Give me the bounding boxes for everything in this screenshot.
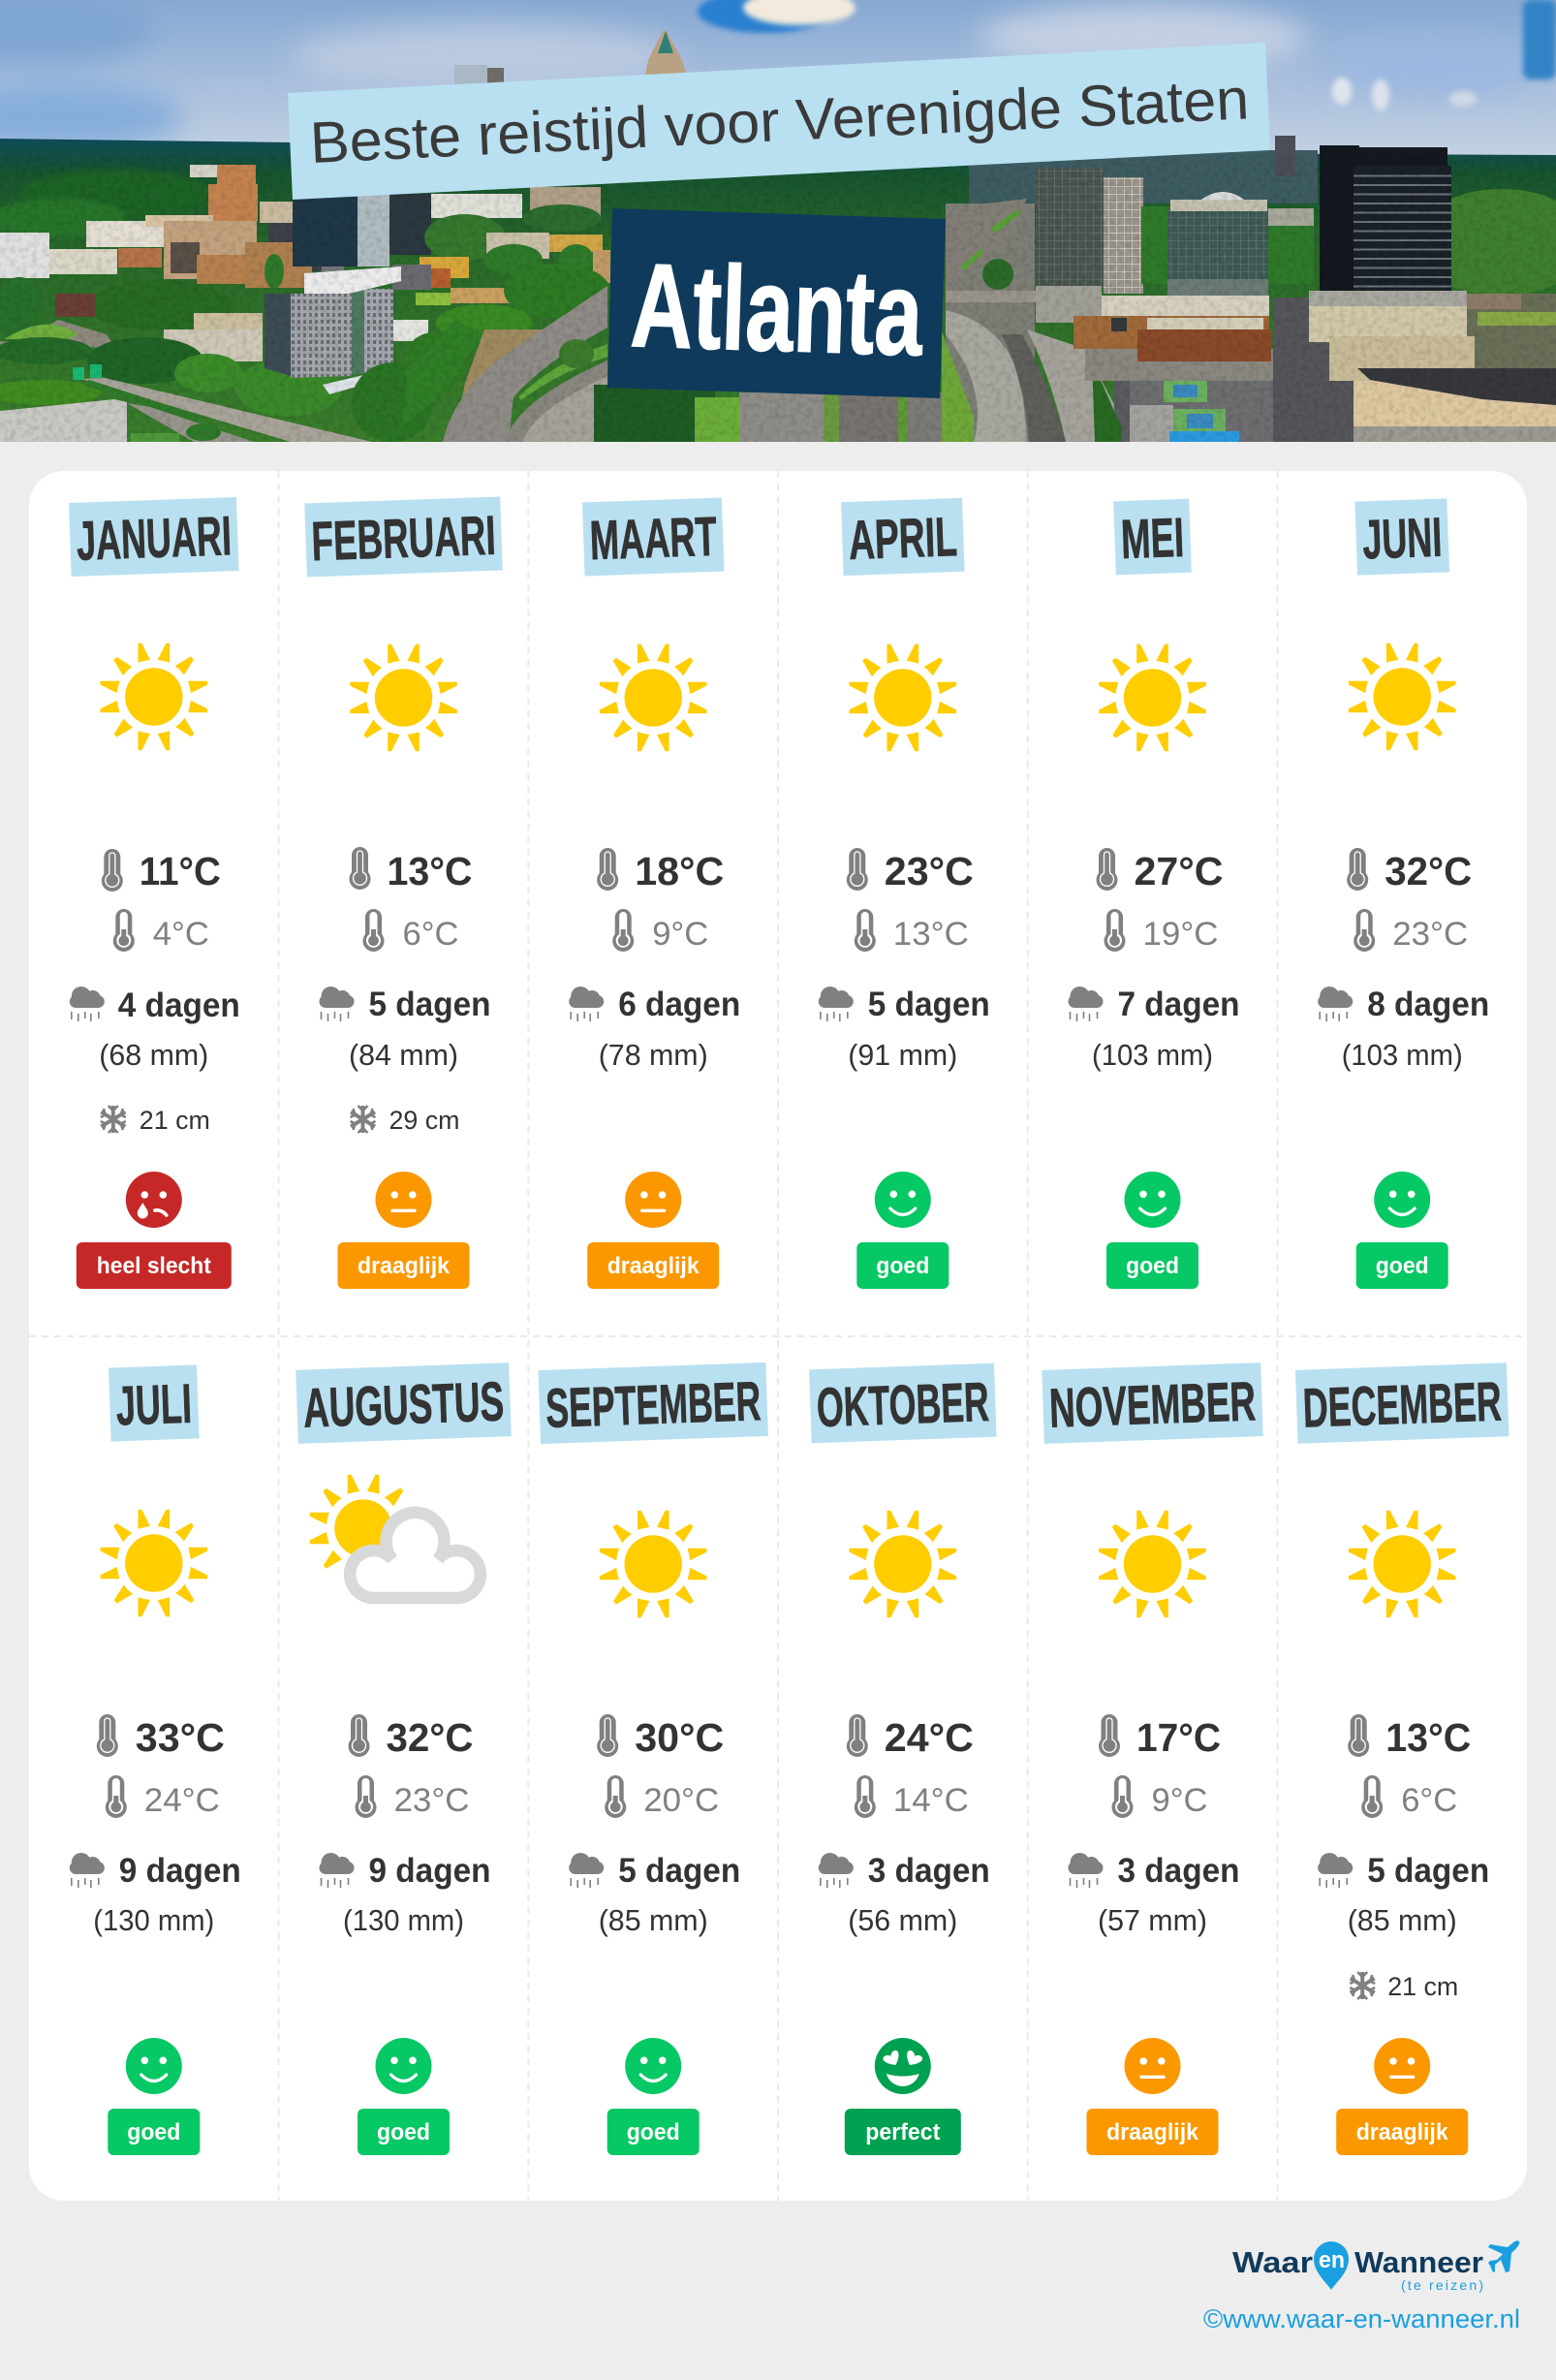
rain days <box>569 986 740 1023</box>
face: good <box>1124 1172 1180 1228</box>
title banner: Beste reistijd voor Verenigde Staten <box>308 66 1251 175</box>
low temperature: 14°C <box>893 1782 969 1819</box>
rain days <box>1068 1852 1240 1890</box>
low temperature: 6°C <box>403 916 458 953</box>
high temperature: 30°C <box>635 1715 724 1760</box>
rain days <box>1068 986 1240 1023</box>
lower left roads and roof <box>81 378 372 442</box>
high temperature: 18°C <box>635 849 724 893</box>
rating badge: goed <box>627 2119 680 2145</box>
high temperature <box>349 1714 473 1760</box>
low temperature <box>605 1775 719 1819</box>
face: good <box>875 1172 931 1228</box>
low temperature: 9°C <box>652 916 708 953</box>
snowfall <box>351 1106 459 1135</box>
rating badge <box>337 1242 469 1289</box>
month label <box>582 498 724 576</box>
header photo: Atlanta skyline <box>0 0 1556 442</box>
rating badge: draaglijk <box>1356 2119 1448 2145</box>
rating badge <box>587 1242 719 1289</box>
face: neutral <box>1374 2038 1430 2094</box>
month label <box>296 1362 512 1444</box>
logo: Waar en Wanneer <box>1232 2240 1519 2293</box>
high temperature <box>1347 848 1472 893</box>
low temperature: 20°C <box>643 1782 719 1819</box>
rating badge <box>358 2109 450 2155</box>
panel: februari <box>304 496 503 1289</box>
rating badge <box>607 2109 700 2155</box>
logo: Waar en Wanneer: (te reizen) <box>1401 2277 1483 2293</box>
rain days: 3 dagen <box>868 1852 990 1890</box>
panel: december <box>1295 1362 1509 2155</box>
rain days: 5 dagen <box>618 1852 740 1890</box>
month label <box>69 497 239 577</box>
month label <box>304 496 503 578</box>
rating badge: goed <box>377 2119 430 2145</box>
panel: augustus <box>296 1362 512 2155</box>
hotel <box>265 294 291 376</box>
month label: MAART <box>589 506 718 572</box>
high temperature: 32°C <box>1385 849 1472 893</box>
left highway and trees <box>352 362 433 442</box>
panel: climate calendar card <box>29 471 1527 2201</box>
low temperature <box>855 909 969 953</box>
high temperature: 32°C <box>386 1715 473 1760</box>
snowfall: 29 cm <box>389 1106 459 1135</box>
icon: airplane <box>1488 2240 1519 2272</box>
panel: juli <box>70 1364 241 2155</box>
rating badge <box>108 2109 200 2155</box>
high temperature <box>847 1714 974 1760</box>
right side base <box>946 204 1035 442</box>
month label: JULI <box>115 1373 193 1437</box>
icon: sun <box>1099 1511 1205 1617</box>
icon: sun behind cloud <box>310 1475 481 1598</box>
high temperature: 23°C <box>885 849 974 893</box>
rain days <box>819 986 990 1023</box>
high temperature: 13°C <box>1385 1715 1471 1760</box>
face: very bad <box>126 1172 182 1228</box>
rating badge <box>1106 1242 1198 1289</box>
rating badge <box>1336 2109 1468 2155</box>
high temperature: 17°C <box>1136 1715 1221 1760</box>
low temperature: 13°C <box>893 916 969 953</box>
month label <box>1354 498 1449 576</box>
month label: OKTOBER <box>816 1371 990 1439</box>
rain days: 9 dagen <box>368 1852 490 1890</box>
month label <box>841 498 965 576</box>
panel: mei <box>1068 499 1240 1289</box>
high temperature: 27°C <box>1134 849 1223 893</box>
month label: FEBRUARI <box>311 505 497 573</box>
face: perfect <box>875 2038 931 2094</box>
low temperature: 19°C <box>1143 916 1219 953</box>
rain days: 4 dagen <box>118 986 240 1024</box>
rain days <box>569 1852 740 1890</box>
high temperature <box>97 1714 225 1760</box>
high temperature <box>1348 1714 1471 1760</box>
month label <box>109 1364 200 1442</box>
month label <box>1042 1362 1263 1444</box>
panel: juni <box>1318 498 1489 1289</box>
rating badge: draaglijk <box>1106 2119 1199 2145</box>
face: neutral <box>625 1172 681 1228</box>
rating badge <box>856 1242 949 1289</box>
high temperature: 24°C <box>885 1715 974 1760</box>
rain days: 8 dagen <box>1367 986 1489 1023</box>
high temperature <box>597 1714 724 1760</box>
low temperature <box>855 1775 969 1819</box>
logo: Waar en Wanneer: Waar <box>1232 2245 1313 2279</box>
low temperature <box>362 909 459 953</box>
icon: sun <box>351 644 457 751</box>
low temperature: 24°C <box>144 1782 220 1819</box>
low temperature: 23°C <box>1392 916 1468 953</box>
high temperature: 13°C <box>388 849 473 893</box>
panel: november <box>1042 1362 1263 2155</box>
rain days: 3 dagen <box>1118 1852 1240 1890</box>
rainfall: (130 mm) <box>343 1903 464 1937</box>
face: good <box>1374 1172 1430 1228</box>
icon: sun <box>1349 1511 1455 1617</box>
low temperature <box>1354 909 1468 953</box>
rain days <box>70 1852 241 1890</box>
rainfall: (57 mm) <box>1098 1903 1207 1937</box>
panel: september <box>538 1362 768 2155</box>
rain days <box>320 986 490 1023</box>
high temperature: 11°C <box>140 849 221 893</box>
low temperature: 6°C <box>1401 1782 1457 1819</box>
rain days: 7 dagen <box>1118 986 1240 1023</box>
rainfall: (84 mm) <box>349 1038 458 1072</box>
rain days <box>819 1852 990 1890</box>
snowfall <box>101 1106 210 1135</box>
low temperature: 9°C <box>1151 1782 1207 1819</box>
icon: location pin <box>1314 2241 1349 2290</box>
low temperature <box>113 909 209 953</box>
rain days: 6 dagen <box>618 986 740 1023</box>
city title box: Atlanta: Atlanta <box>629 239 925 381</box>
rating badge: heel slecht <box>97 1253 211 1279</box>
rainfall: (68 mm) <box>99 1038 208 1072</box>
city title box: Atlanta <box>607 208 946 398</box>
rating badge: goed <box>127 2119 180 2145</box>
low temperature: 23°C <box>393 1782 469 1819</box>
logo: Waar en Wanneer: en <box>1319 2247 1345 2273</box>
rating badge <box>1087 2109 1219 2155</box>
snowfall: 21 cm <box>140 1106 210 1135</box>
face: good <box>625 2038 681 2094</box>
rainfall: (103 mm) <box>1342 1038 1463 1072</box>
rainfall: (91 mm) <box>848 1038 957 1072</box>
rain days: 9 dagen <box>119 1852 241 1890</box>
high temperature <box>1099 1714 1221 1760</box>
month label <box>538 1362 768 1444</box>
panel: maart <box>569 498 740 1289</box>
low temperature: 4°C <box>153 916 209 953</box>
high temperature: 33°C <box>136 1715 225 1760</box>
low temperature <box>1105 909 1219 953</box>
face: good <box>376 2038 432 2094</box>
rating badge: draaglijk <box>607 1253 700 1279</box>
icon: sun <box>101 643 207 750</box>
rating badge <box>845 2109 961 2155</box>
snowfall: 21 cm <box>1387 1972 1458 2001</box>
rating badge: goed <box>1126 1253 1179 1279</box>
icon: sun <box>1099 644 1205 751</box>
icon: sun <box>600 1511 706 1617</box>
snowfall <box>1350 1972 1458 2001</box>
title banner <box>288 43 1270 200</box>
month label: JANUARI <box>76 505 233 573</box>
panel: oktober <box>809 1363 997 2155</box>
month label <box>1113 499 1192 575</box>
month label <box>809 1363 997 1443</box>
rating badge: goed <box>1376 1253 1429 1279</box>
rain days <box>1318 1852 1489 1890</box>
month label: AUGUSTUS <box>302 1370 505 1440</box>
low temperature <box>355 1775 469 1819</box>
website url: ©www.waar-en-wanneer.nl <box>1203 2304 1520 2333</box>
rain days <box>70 986 240 1024</box>
month label: MEI <box>1120 507 1185 571</box>
low temperature <box>106 1775 220 1819</box>
panel: april <box>819 498 990 1289</box>
low temperature <box>612 909 708 953</box>
low temperature <box>1361 1775 1457 1819</box>
month label: APRIL <box>848 506 958 572</box>
panel: januari <box>69 497 240 1289</box>
left buildings <box>208 165 258 221</box>
low temperature <box>1112 1775 1207 1819</box>
rating badge: goed <box>876 1253 929 1279</box>
rainfall: (78 mm) <box>599 1038 708 1072</box>
high temperature <box>597 848 724 893</box>
face: neutral <box>1124 2038 1180 2094</box>
logo: Waar en Wanneer: Wanneer <box>1354 2245 1483 2279</box>
icon: sun <box>600 644 706 751</box>
right buildings <box>1036 168 1104 288</box>
rain days <box>1318 986 1489 1023</box>
rating badge <box>1356 1242 1448 1289</box>
rainfall: (85 mm) <box>599 1903 708 1937</box>
rating badge: perfect <box>865 2119 940 2145</box>
month label: NOVEMBER <box>1048 1370 1257 1440</box>
rating badge: draaglijk <box>358 1253 451 1279</box>
high temperature <box>349 847 473 893</box>
rain days: 5 dagen <box>1367 1852 1489 1890</box>
centre bottom <box>594 385 715 442</box>
rating badge <box>77 1242 232 1289</box>
rainfall: (85 mm) <box>1348 1903 1457 1937</box>
face: neutral <box>376 1172 432 1228</box>
rain days: 5 dagen <box>868 986 990 1023</box>
high temperature <box>847 848 974 893</box>
icon: sun <box>850 644 956 751</box>
rainfall: (130 mm) <box>93 1903 214 1937</box>
rainfall: (56 mm) <box>848 1903 957 1937</box>
high temperature <box>1097 848 1223 893</box>
month label: JUNI <box>1361 507 1443 571</box>
month label: SEPTEMBER <box>545 1370 762 1440</box>
icon: sun <box>850 1511 956 1617</box>
face: good <box>126 2038 182 2094</box>
rain days: 5 dagen <box>368 986 490 1023</box>
rain days <box>320 1852 490 1890</box>
icon: sun <box>101 1510 207 1616</box>
rainfall: (103 mm) <box>1092 1038 1213 1072</box>
icon: sun <box>1349 643 1455 750</box>
high temperature <box>102 849 221 893</box>
